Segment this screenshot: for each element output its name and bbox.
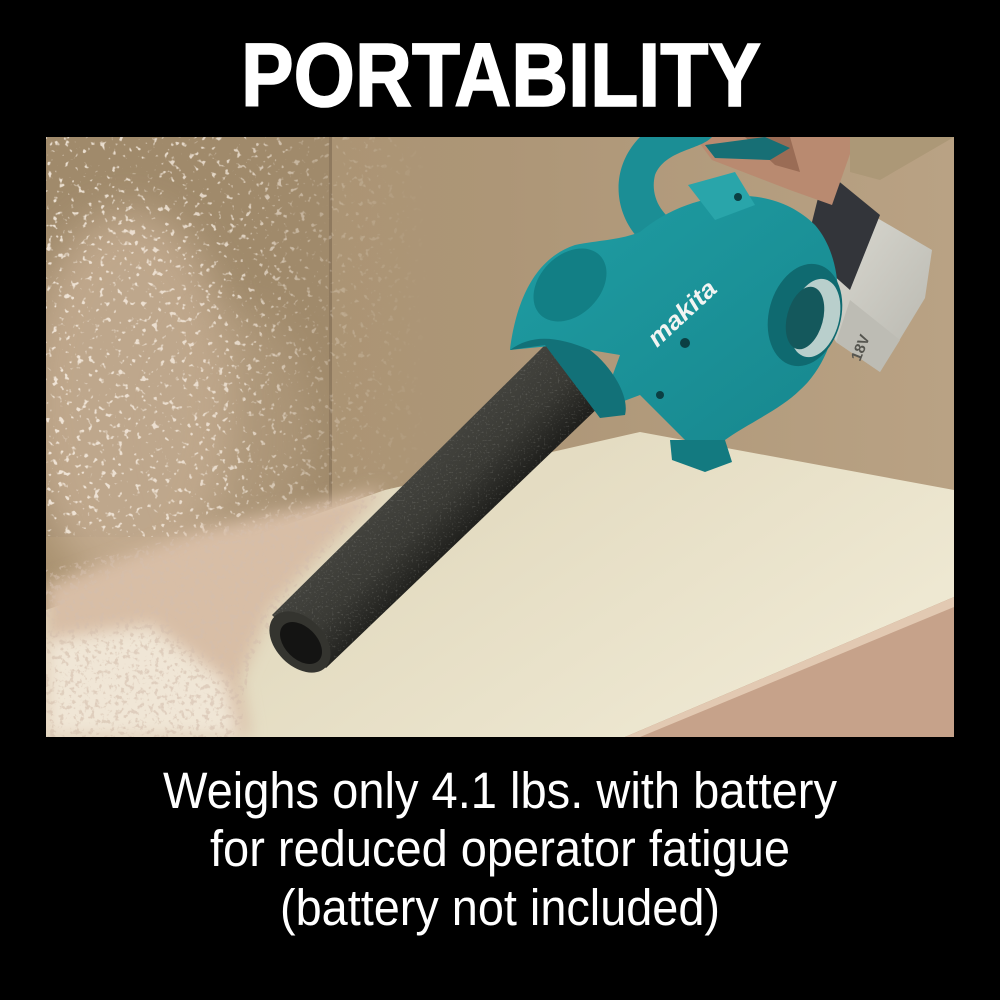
sawdust pile — [46, 488, 386, 737]
caption — [163, 762, 837, 936]
table front face — [625, 597, 954, 737]
title: PORTABILITY — [241, 26, 761, 126]
caption: for reduced operator fatigue — [210, 820, 790, 877]
hand — [695, 137, 954, 205]
nozzle — [269, 346, 595, 673]
caption: (battery not included) — [280, 879, 720, 936]
caption: Weighs only 4.1 lbs. with battery — [163, 762, 837, 819]
wall background — [46, 137, 954, 737]
blower body — [510, 137, 853, 472]
blower body: makita — [642, 275, 723, 352]
sawdust spray — [46, 137, 402, 570]
table top — [46, 432, 954, 737]
battery: 18V — [848, 332, 874, 363]
photo: blower clearing sawdust — [46, 137, 954, 737]
battery — [805, 170, 932, 372]
